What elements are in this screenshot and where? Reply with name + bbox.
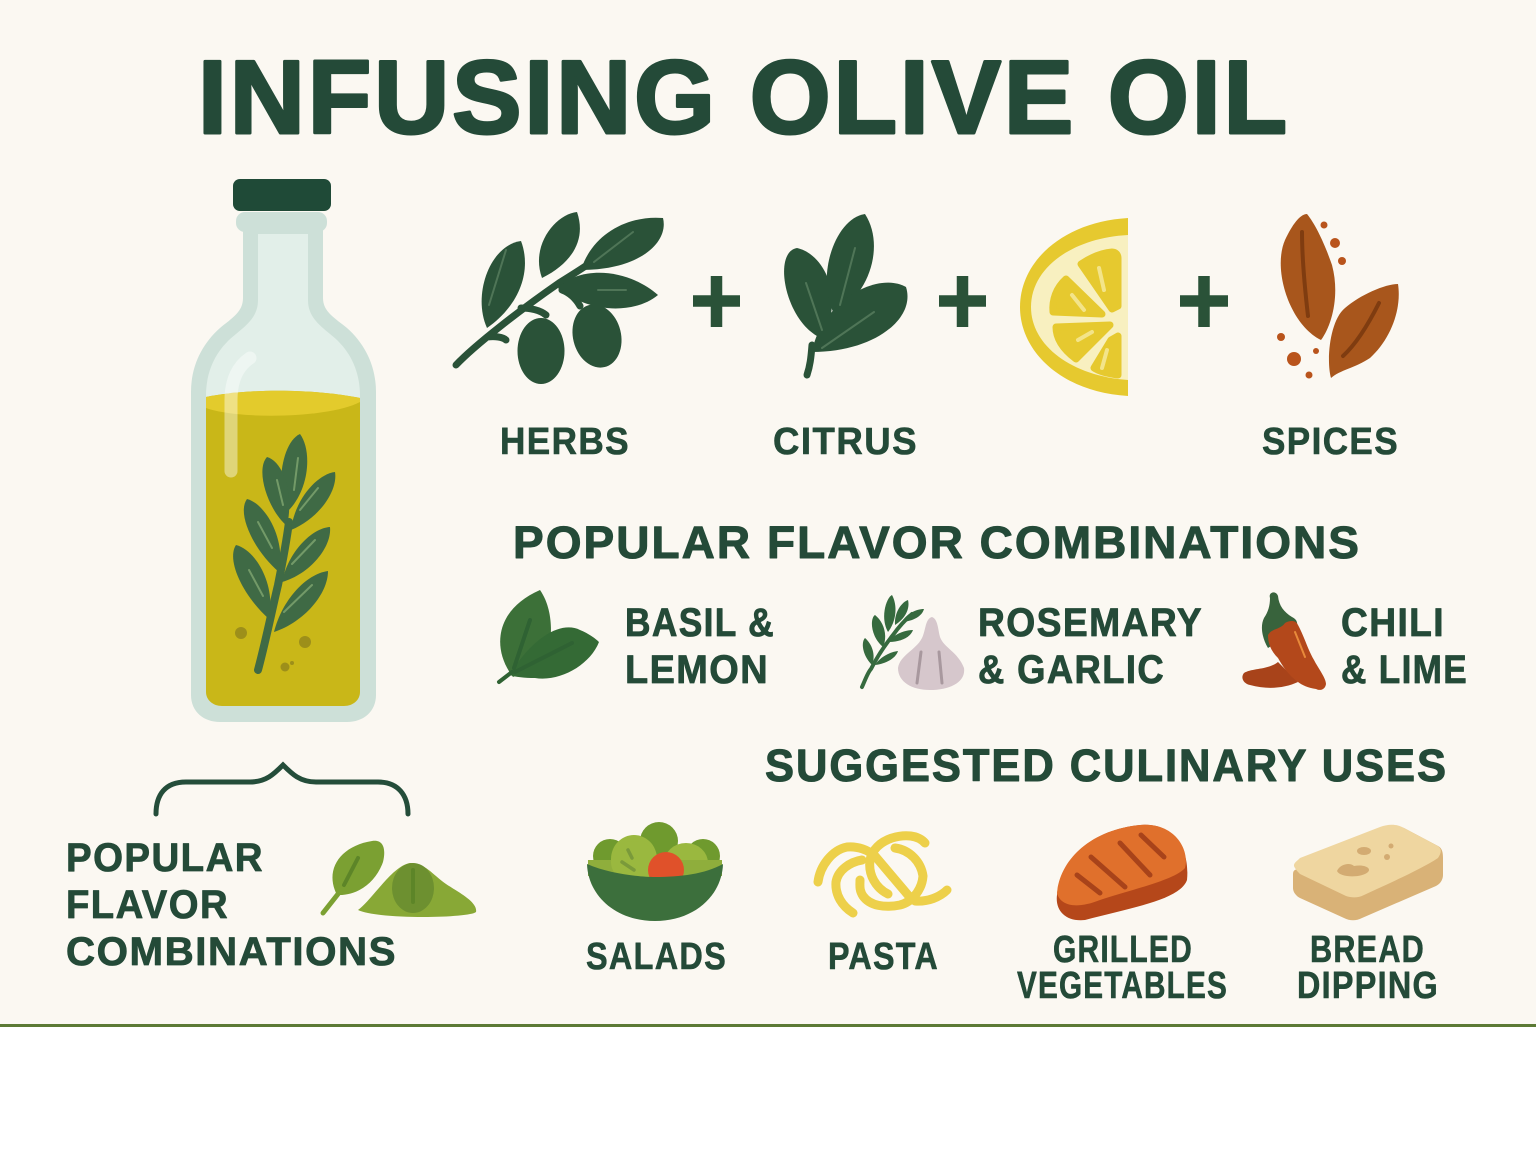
icon: pasta swirls xyxy=(818,836,947,913)
section: popular flavor combinations (lower left) xyxy=(66,836,476,974)
icon: lemon slice xyxy=(1020,218,1128,396)
bottle glass xyxy=(191,228,376,722)
icon: plus xyxy=(939,276,986,327)
label: herbs: HERBS xyxy=(500,421,630,463)
heading: popular flavor combinations: POPULAR FLAVOR COMBINATIONS xyxy=(513,517,1361,568)
use: pasta xyxy=(818,836,947,978)
label: BREAD xyxy=(1310,929,1425,971)
illustration: olive oil bottle xyxy=(191,179,376,722)
rosemary sprig in oil xyxy=(233,434,335,670)
section: popular flavor combinations (lower left): COMBINATIONS xyxy=(66,930,397,974)
bottle neck ring xyxy=(236,212,327,232)
heading lines: POPULAR xyxy=(66,836,264,880)
combo: rosemary and garlic xyxy=(862,595,1203,692)
icon: rosemary sprig xyxy=(862,595,924,687)
peppercorns xyxy=(235,627,311,672)
combo: chili and lime: & LIME xyxy=(1341,648,1468,692)
label: citrus: CITRUS xyxy=(773,421,918,463)
icon: spices xyxy=(1277,214,1399,378)
label: ROSEMARY xyxy=(978,601,1203,645)
label: spices: SPICES xyxy=(1262,421,1399,463)
combo: chili and lime xyxy=(1242,592,1468,692)
icon: herbs (olive branch) xyxy=(456,212,664,384)
icon: basil leaf and ground herbs xyxy=(323,841,476,917)
combo: basil and lemon: LEMON xyxy=(625,648,769,692)
icon: plus xyxy=(1180,276,1228,327)
label: CHILI xyxy=(1341,601,1445,645)
label: BASIL & xyxy=(625,601,775,645)
icon: plus xyxy=(693,276,740,327)
section: popular flavor combinations (lower left): FLAVOR xyxy=(66,883,229,927)
icon: basil leaves xyxy=(499,590,599,682)
bottle cap xyxy=(233,179,331,211)
icon: salad bowl xyxy=(587,822,723,921)
glass highlight xyxy=(231,358,250,471)
combo: basil and lemon xyxy=(499,590,775,692)
title: INFUSING OLIVE OIL xyxy=(198,40,1287,156)
brace xyxy=(156,765,408,814)
use: bread dipping: DIPPING xyxy=(1297,965,1439,1007)
olive oil xyxy=(206,391,360,706)
use: bread dipping xyxy=(1293,825,1443,1007)
icon: garlic xyxy=(898,617,964,690)
icon: citrus leaves xyxy=(784,214,907,375)
label: PASTA xyxy=(828,936,939,978)
use: salads xyxy=(586,822,727,978)
use: grilled vegetables: VEGETABLES xyxy=(1017,965,1228,1007)
heading: suggested culinary uses: SUGGESTED CULINARY USES xyxy=(765,740,1448,791)
combo: rosemary and garlic: & GARLIC xyxy=(978,648,1165,692)
use: grilled vegetables xyxy=(1017,825,1228,1007)
label: GRILLED xyxy=(1053,929,1193,971)
icon: grilled vegetable xyxy=(1057,825,1187,920)
icon: bread slice xyxy=(1293,825,1443,920)
icon: chili peppers xyxy=(1242,592,1326,690)
label: SALADS xyxy=(586,936,727,978)
